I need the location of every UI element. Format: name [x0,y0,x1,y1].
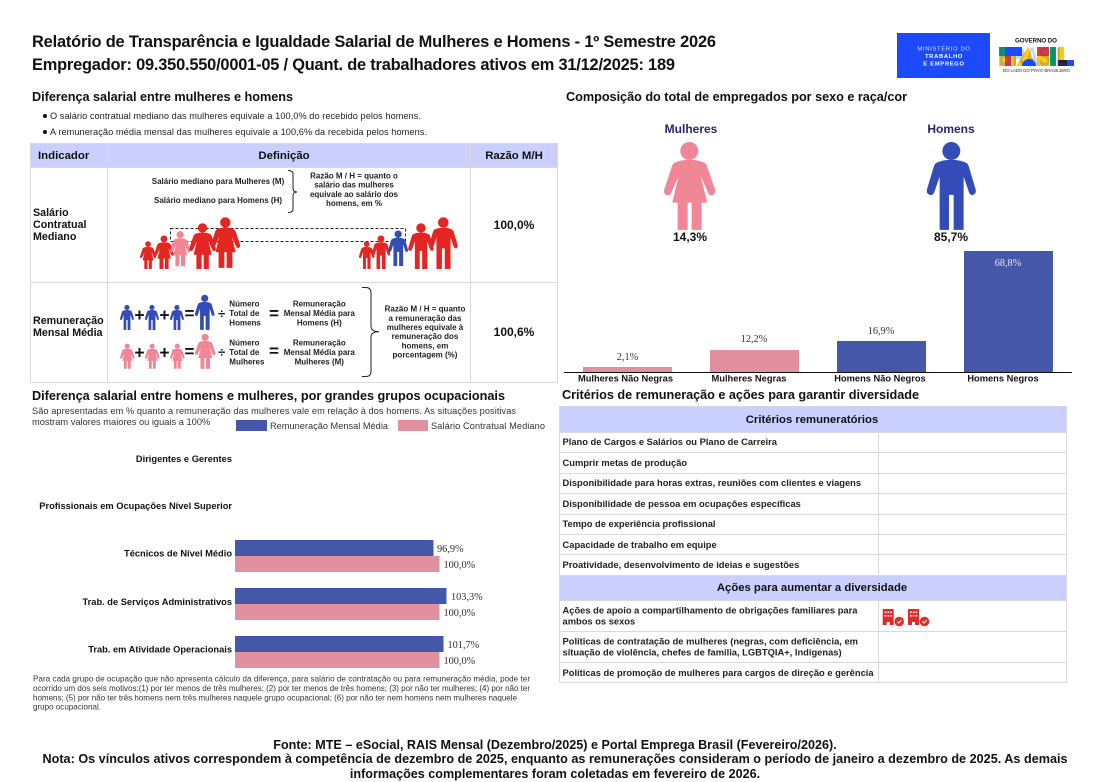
definition: razão M/H salário: Razão M / H = quanto o [310,172,398,180]
row label: salário contratual mediano: Contratual [33,219,86,231]
bar chart: raça e sexo: Mulheres Negras [712,374,786,384]
logo: Ministério do Trabalho e Emprego [897,33,990,78]
bar chart: raça e sexo: Homens Negros [967,374,1039,384]
definition: salário mediano labels: Salário mediano para Mulheres (M) [152,177,285,186]
icon group: homens em ordem salarial [359,217,458,269]
definition: remuneração média labels: Mulheres (M) [295,357,344,366]
chart: grupos ocupacionais: 96,9% [437,544,464,555]
chart: grupos ocupacionais [39,454,483,668]
panel: diferença salarial entre mulheres e homens [30,90,558,383]
table header: Razão M/H [485,150,543,162]
actions list: Políticas de promoção de mulheres para cargos de direção e gerência [562,668,874,678]
table header: Indicador [38,150,90,162]
brace [362,288,379,376]
table header: Definição [258,150,310,162]
bar chart: raça e sexo: 12,2% [741,334,768,345]
table: indicadores [30,143,558,383]
chart: grupos ocupacionais: 100,0% [444,656,476,667]
median dashed guide [170,228,406,242]
row label: remuneração mensal média: Mensal Média [33,327,104,339]
formula: homens: + [159,305,170,325]
logo: Ministério do Trabalho e Emprego: MINISTÉRIO DO [917,46,971,52]
pictogram: homens: Homens [927,122,975,136]
icon group: mulheres em ordem salarial [140,217,240,269]
heading: grupos ocupacionais: Diferença salarial entre homens e mulheres, por grandes grupos ocupacionais [32,389,505,403]
icons: empresa com ação confirmada [883,609,929,626]
formula: mulheres: Mulheres [229,357,265,366]
heading: critérios: Critérios de remuneração e ações para garantir diversidade [562,388,919,402]
formula: mulheres [120,334,279,369]
pictogram: homens [927,122,976,244]
definition: razão M/H remuneração: a remuneração das [389,314,462,323]
logo: Governo do Brasil: GOVERNO DO [1015,38,1057,44]
criteria list: Plano de Cargos e Salários ou Plano de Carreira [562,437,778,447]
brace [288,170,297,212]
formula: mulheres: Total de [229,348,260,357]
bar chart: raça e sexo: 68,8% [995,258,1022,269]
footnote: grupo ocupacional. [33,703,101,712]
formula: homens: ÷ [218,306,225,321]
formula: homens: = [269,304,279,323]
formula: mulheres: + [159,342,170,362]
chart: grupos ocupacionais: Trab. em Atividade Operacionais [88,645,232,655]
definition: razão M/H salário: equivale ao salário dos [310,190,399,199]
definition: razão M/H remuneração: porcentagem (%) [393,351,458,360]
chart: grupos ocupacionais: Trab. de Serviços Administrativos [82,597,232,607]
chart: grupos ocupacionais: 103,3% [451,592,483,603]
formula: homens: + [134,305,145,325]
logo: Governo do Brasil: DO LADO DO POVO BRASILEIRO [1003,68,1070,73]
legend: Remuneração Mensal Média [270,421,389,431]
definition: razão M/H remuneração: Razão M / H = quanto [385,305,465,314]
bar chart: raça e sexo: Mulheres Não Negras [578,374,673,384]
description text: São apresentadas em % quanto a remuneração das mulheres vale em relação à dos homens. As situações positivas [32,406,516,416]
actions list: ambos os sexos [562,616,635,626]
heading: composição: Composição do total de empregados por sexo e raça/cor [566,90,907,104]
panel: critérios de remuneração e ações [559,388,1067,683]
formula: homens: Homens [229,319,261,328]
title [32,33,716,74]
formula: mulheres: ÷ [218,344,225,360]
legend: Salário Contratual Mediano [431,421,545,431]
footer note: Nota: Os vínculos ativos correspondem à competência de dezembro de 2025, enquanto as remunerações consideram o período de janeiro a dezembro de 2025. As demais [42,752,1068,766]
definition: remuneração média labels: Remuneração [293,339,346,348]
description text: mostram valores maiores ou iguais a 100% [32,417,210,427]
panel: composição por sexo e raça/cor [564,90,1072,384]
formula: mulheres: = [185,342,195,361]
chart: grupos ocupacionais: Profissionais em Ocupações Nível Superior [39,501,232,511]
definition: razão M/H remuneração [385,305,465,360]
formula: mulheres: Número [229,339,260,348]
bar chart: raça e sexo [564,251,1072,384]
formula: homens: Total de [229,309,260,318]
definition: remuneração média labels: Mensal Média para [284,348,355,357]
definition: razão M/H salário: homens, em % [326,199,382,208]
description text [32,406,516,427]
row label: salário contratual mediano: Salário [33,207,69,219]
formula: homens: = [185,304,195,323]
footer note: informações complementares foram coletadas em fevereiro de 2026. [350,767,760,781]
table: critérios e ações [559,406,1067,683]
chart: grupos ocupacionais: 100,0% [444,560,476,571]
definition: salário mediano labels: Salário mediano para Homens (H) [154,196,282,205]
formula: mulheres: = [269,342,279,360]
value: razão salário mediano: 100,0% [494,218,535,232]
bullet text block [43,111,427,137]
actions list: Políticas de contratação de mulheres (negras, com deficiência, em [562,636,858,646]
definition: remuneração média labels: Remuneração [293,300,346,309]
bullet text block: A remuneração média mensal das mulheres equivale a 100,6% da recebida pelos homens. [50,127,427,137]
definition: remuneração média labels: Mensal Média para [284,309,355,318]
definition: remuneração média labels [284,300,355,366]
definition: razão M/H remuneração: homens, em [402,341,448,350]
formula: homens: Número [229,300,260,309]
logo: Ministério do Trabalho e Emprego: TRABALHO [925,54,963,60]
definition: salário mediano labels [152,177,285,205]
bar chart: raça e sexo: 16,9% [868,326,895,337]
row label: remuneração mensal média: Remuneração [33,315,104,327]
actions list: situação de violência, chefes de família, LGBTQIA+, Indígenas) [562,648,842,658]
pictogram: mulheres: 14,3% [673,230,707,244]
definition: razão M/H remuneração: remuneração dos [392,332,459,341]
actions list: Ações de apoio a compartilhamento de obrigações familiares para [562,606,858,616]
bar chart: raça e sexo: Homens Não Negros [834,374,926,384]
logo: Governo do Brasil [999,38,1074,73]
definition: razão M/H salário [310,172,399,208]
pictogram: homens: 85,7% [934,230,968,244]
panel: diferença por grupos ocupacionais [32,389,545,712]
chart: grupos ocupacionais: 101,7% [448,640,480,651]
criteria list: Proatividade, desenvolvimento de ideias e sugestões [562,560,799,570]
table header [38,150,543,162]
footnote: ocorrido um dos seis motivos:(1) por ter menos de três mulheres; (2) por ter menos de três homens; (3) por não ter mulheres; (4) por não ter [33,684,530,693]
chart: grupos ocupacionais: Técnicos de Nível Médio [124,549,232,559]
footnote: homens; (5) por não ter três homens nem três mulheres naquele grupo ocupacional; (6) por não ter nem homens nem mulheres naquele [33,694,518,702]
value: razão remuneração: 100,6% [494,325,535,339]
definition: razão M/H salário: salário das mulheres [314,181,394,190]
chart: grupos ocupacionais: Dirigentes e Gerentes [136,454,232,464]
formula: mulheres: + [134,342,145,362]
actions list [562,606,874,678]
formula: homens [120,295,279,330]
criteria list: Disponibilidade para horas extras, reuniões com clientes e viagens [562,478,861,488]
title: Relatório de Transparência e Igualdade Salarial de Mulheres e Homens - 1º Semestre 2026 [32,33,716,51]
legend [236,420,545,431]
bar chart: raça e sexo: 2,1% [617,352,639,363]
criteria list: Tempo de experiência profissional [562,519,716,529]
heading: diferença salarial: Diferença salarial entre mulheres e homens [32,90,293,104]
logo: Ministério do Trabalho e Emprego: E EMPREGO [923,62,965,68]
criteria list: Cumprir metas de produção [562,458,687,468]
footnote [33,674,530,712]
section header: critérios remuneratórios: Critérios remuneratórios [746,414,878,426]
title: Empregador: 09.350.550/0001-05 / Quant. de trabalhadores ativos em 31/12/2025: 189 [32,56,675,74]
chart: grupos ocupacionais: 100,0% [444,608,476,619]
criteria list [562,437,861,570]
footer note: Fonte: MTE – eSocial, RAIS Mensal (Dezembro/2025) e Portal Emprega Brasil (Fevereiro/2026). [273,738,837,752]
criteria list: Capacidade de trabalho em equipe [562,540,717,550]
bullet text block: O salário contratual mediano das mulheres equivale a 100,0% do recebido pelos homens. [50,111,421,121]
criteria list: Disponibilidade de pessoa em ocupações específicas [562,499,801,509]
definition: remuneração média labels: Homens (H) [297,319,342,328]
row label: salário contratual mediano: Mediano [33,231,77,243]
section header: ações: Ações para aumentar a diversidade [717,582,907,594]
footnote: Para cada grupo de ocupação que não apresenta cálculo da diferença, para salário de contratação ou para remuneração média, pode ter [33,674,530,684]
pictogram: mulheres [664,122,718,244]
footer note [42,738,1068,781]
logo: Governo do Brasil: BRASIL [999,42,1067,72]
definition: razão M/H remuneração: mulheres equivale à [387,323,464,332]
pictogram: mulheres: Mulheres [665,122,718,136]
